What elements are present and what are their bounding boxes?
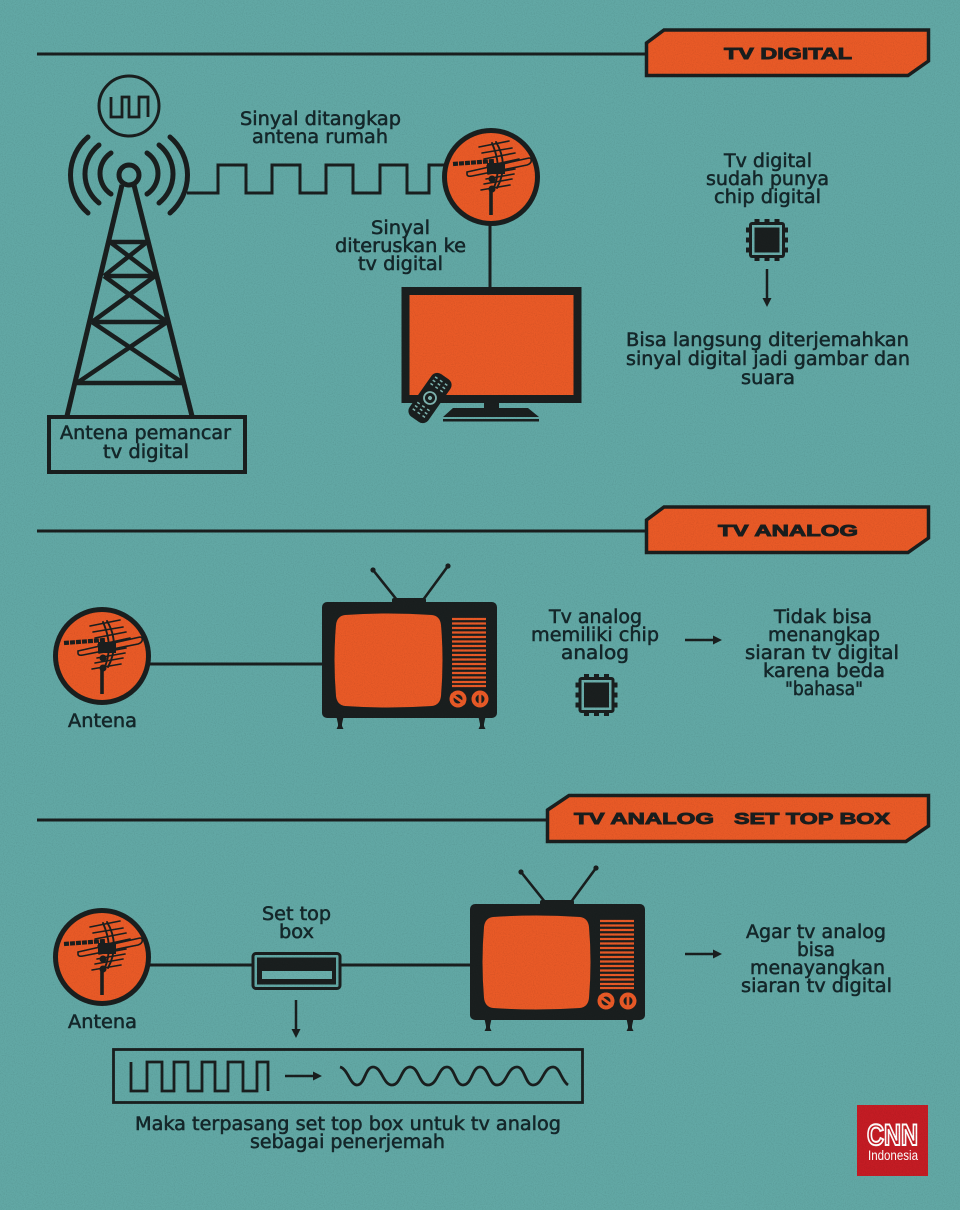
text: cannot receive: menangkap	[768, 625, 880, 646]
icon: analog chip	[576, 674, 618, 716]
text: translated directly: Bisa langsung diterjemahkan	[626, 330, 909, 351]
header: TV Analog Set Top Box: SET TOP BOX	[734, 811, 890, 828]
icon: digital TV with remote	[406, 291, 578, 426]
text: digital chip: sudah punya	[706, 169, 829, 190]
label: antenna: Antena	[68, 711, 137, 732]
text: cannot receive: "bahasa"	[785, 679, 863, 700]
text: can show digital: bisa	[797, 940, 835, 961]
icon: set top box	[253, 954, 340, 988]
icon: house antenna	[444, 130, 538, 224]
header: TV Analog	[37, 507, 928, 552]
icon: antenna	[56, 910, 148, 1004]
icon: analog TV	[322, 563, 497, 729]
text: signal caught: antena rumah	[252, 127, 388, 148]
text: cannot receive: Tidak bisa	[773, 607, 872, 628]
arrow: chip down	[762, 269, 772, 307]
logo: CNN Indonesia: Indonesia	[868, 1148, 918, 1163]
icon: digital signal badge	[99, 76, 159, 136]
icon: remote control	[406, 370, 454, 426]
header: TV Digital: TV DIGITAL	[724, 46, 852, 63]
label: transmitter antenna: Antena pemancar	[60, 423, 231, 444]
label: transmitter antenna: tv digital	[103, 442, 189, 463]
text: translated directly: suara	[741, 368, 795, 389]
text: can show digital: menayangkan	[750, 958, 885, 979]
text: digital chip: chip digital	[714, 187, 821, 208]
text: digital chip: Tv digital	[723, 151, 812, 172]
text: cannot receive	[745, 607, 899, 700]
text: cannot receive: karena beda	[763, 661, 885, 682]
text: translated directly: sinyal digital jadi gambar dan	[626, 349, 910, 370]
text: signal forwarded	[335, 218, 466, 275]
text: can show digital	[741, 922, 892, 997]
header: TV Digital	[37, 30, 928, 76]
text: analog chip: analog	[561, 643, 629, 664]
label: antenna: Antena	[68, 1012, 137, 1033]
text: signal forwarded: tv digital	[358, 254, 443, 275]
arrow: box down	[292, 1000, 300, 1038]
connector: antenna to analog TV	[150, 662, 322, 666]
label: transmitter antenna	[49, 417, 245, 472]
text: can show digital: Agar tv analog	[746, 922, 886, 943]
icon: analog TV with set top box	[470, 865, 645, 1031]
icon: digital chip	[746, 219, 788, 261]
text: signal forwarded: Sinyal	[371, 218, 430, 239]
logo: CNN Indonesia: CNN	[867, 1119, 918, 1152]
label: set top box	[262, 904, 331, 943]
text: analog chip: Tv analog	[548, 607, 642, 628]
header: TV Analog Set Top Box	[37, 796, 928, 842]
icon: antenna	[56, 610, 148, 702]
text: analog chip: memiliki chip	[531, 625, 659, 646]
text: signal caught: Sinyal ditangkap	[240, 109, 401, 130]
text: cannot receive: siaran tv digital	[745, 643, 899, 664]
text: conclusion	[135, 1114, 561, 1153]
text: conclusion: sebagai penerjemah	[250, 1132, 445, 1153]
text: signal forwarded: diteruskan ke	[335, 236, 466, 257]
panel: digital to analog conversion	[114, 1050, 582, 1102]
header: TV Analog Set Top Box: TV ANALOG	[574, 811, 714, 828]
connector: antenna to TV via box	[150, 964, 470, 966]
text: conclusion: Maka terpasang set top box untuk tv analog	[135, 1114, 561, 1135]
connector: antenna to TV	[488, 224, 492, 288]
text: translated directly	[626, 330, 910, 389]
logo: CNN Indonesia	[857, 1105, 928, 1176]
header: TV Analog: TV ANALOG	[718, 523, 858, 540]
text: digital chip	[706, 151, 829, 208]
text: can show digital: siaran tv digital	[741, 976, 892, 997]
arrow: final result	[685, 950, 722, 958]
signal wave to house antenna	[187, 165, 445, 193]
label: set top box: box	[279, 922, 314, 943]
arrow: analog result	[685, 636, 722, 644]
icon: transmission tower	[67, 76, 192, 416]
label: set top box: Set top	[262, 904, 331, 925]
text: analog chip	[531, 607, 659, 664]
text: signal caught	[240, 109, 401, 148]
